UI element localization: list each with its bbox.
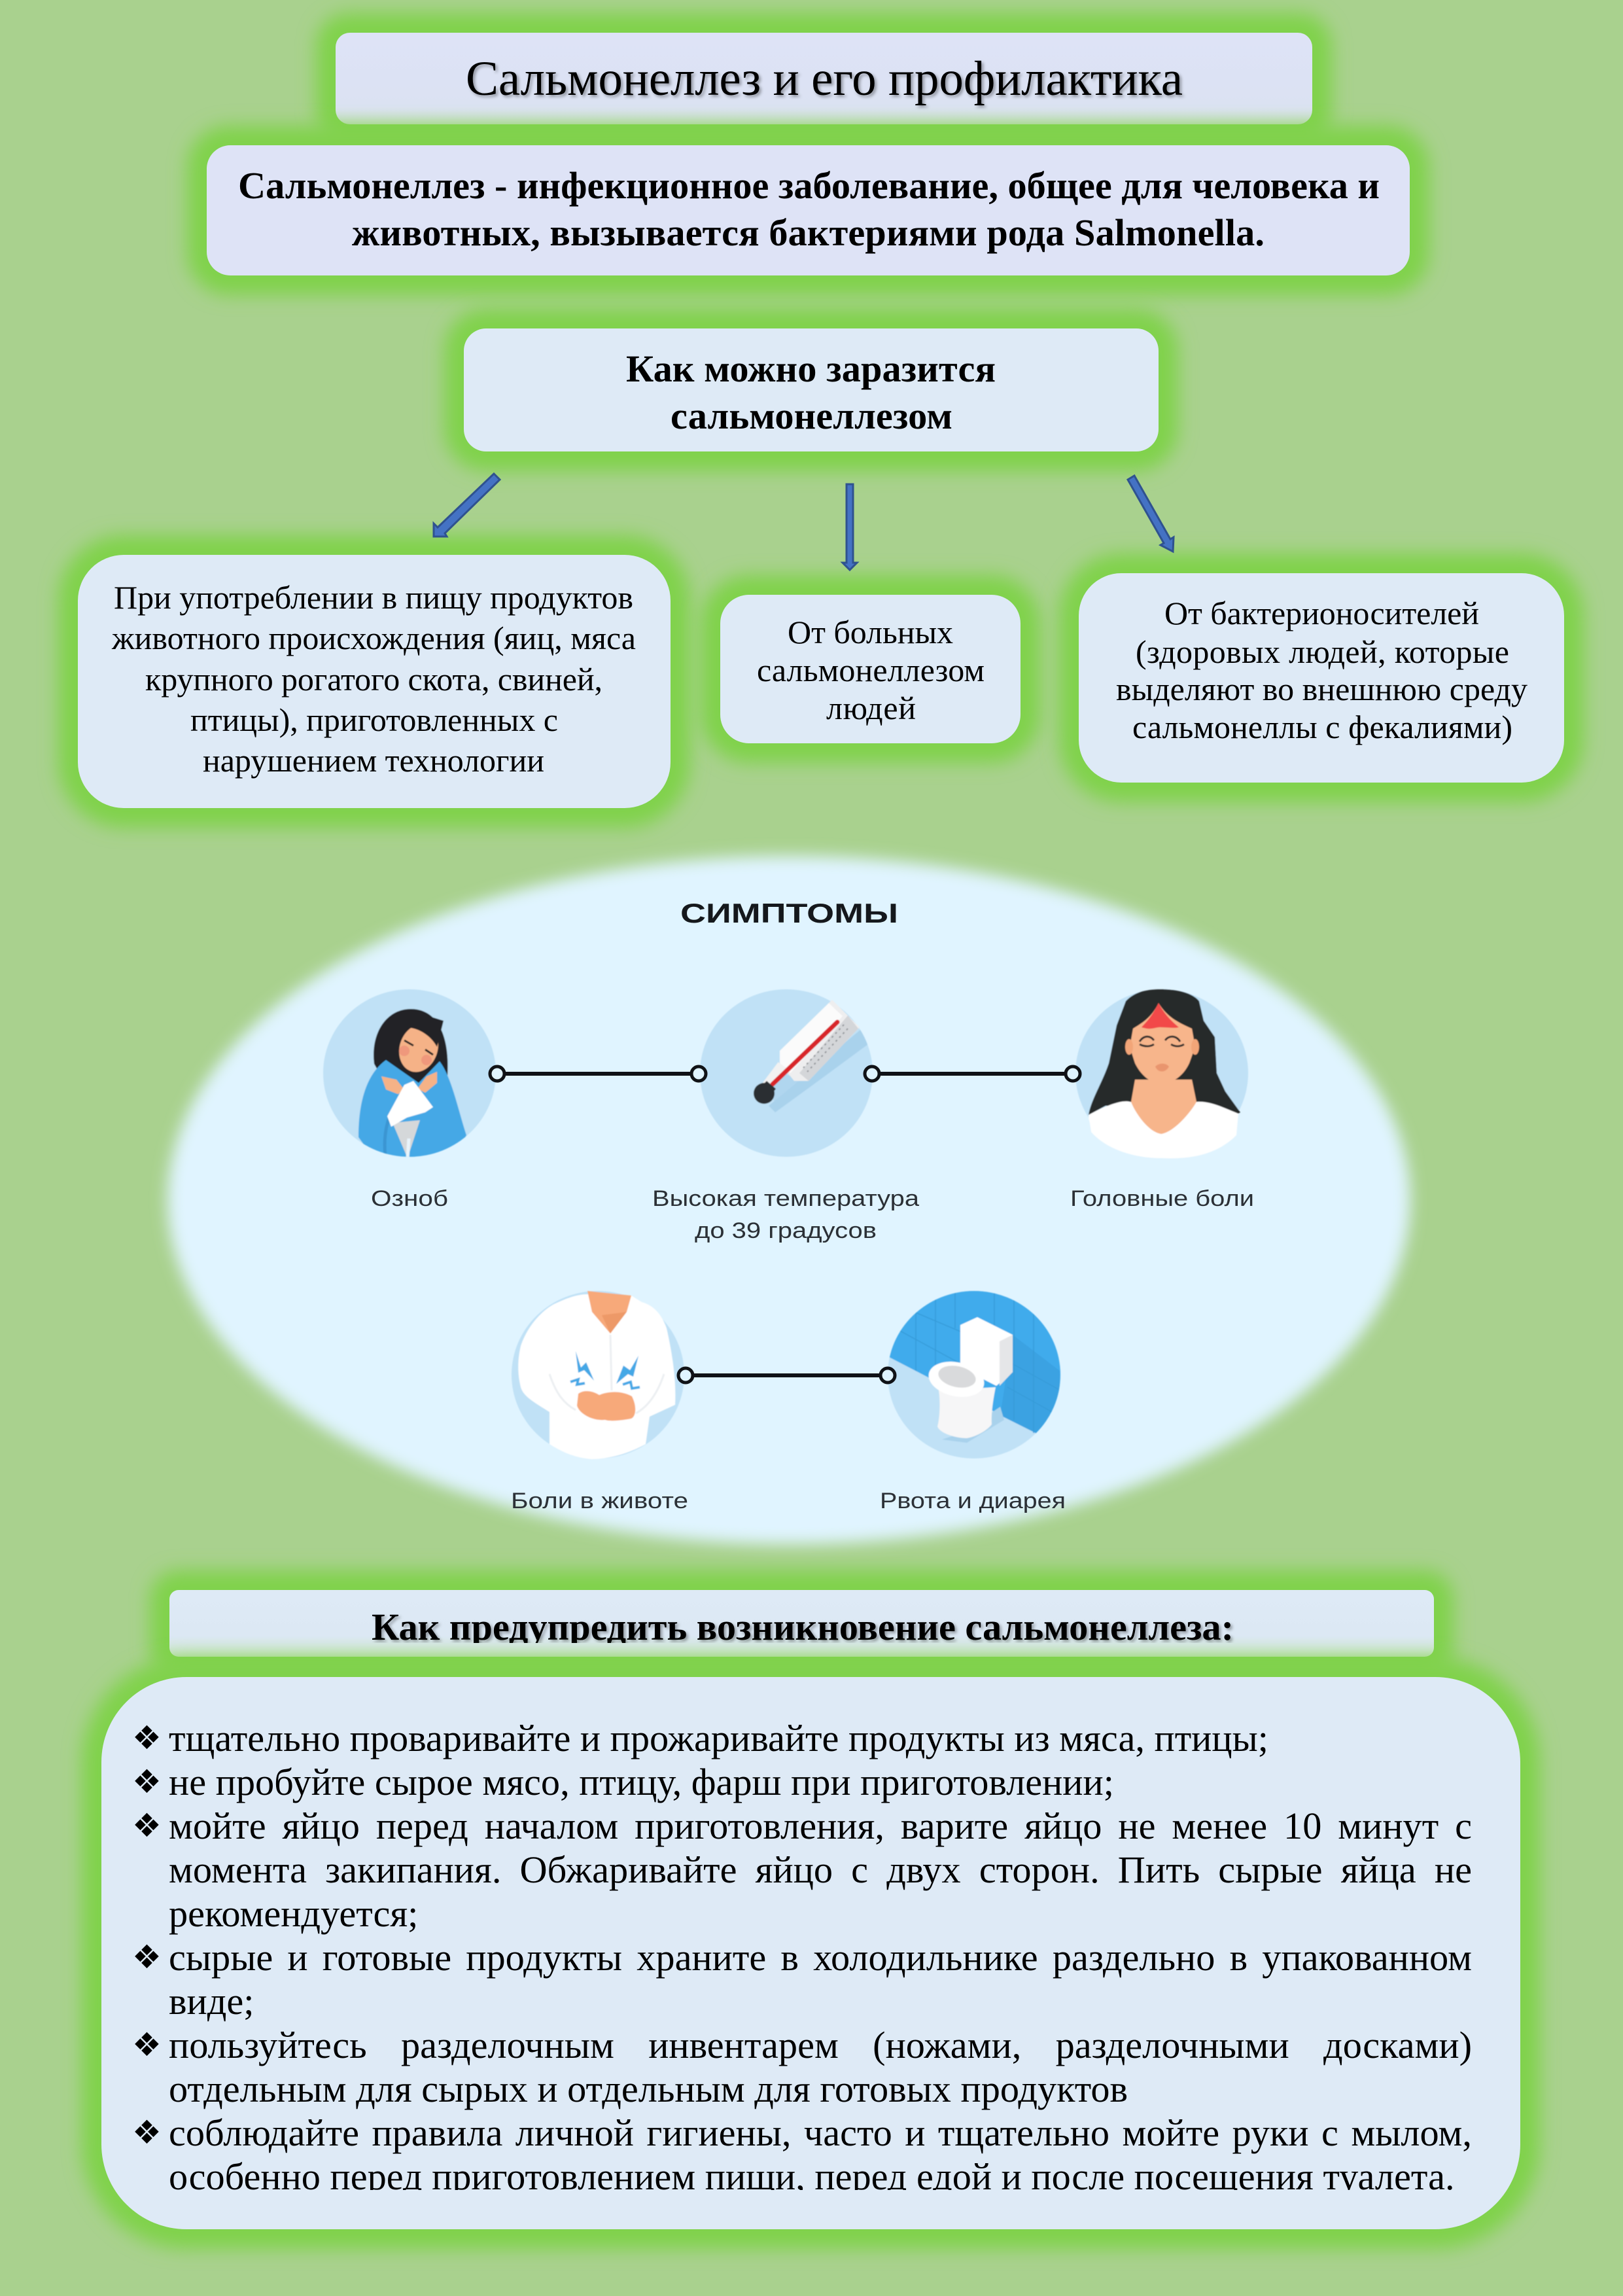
panel: how to get infected heading (444, 309, 1178, 471)
arrow: middle (843, 484, 857, 570)
connector: chills to fever (490, 1067, 706, 1081)
panel: prevention list background (82, 1657, 1540, 2249)
label: chills: Озноб (371, 1186, 448, 1211)
prevention heading text: Как предупредить возникновение сальмонеллеза: (372, 1606, 1234, 1648)
symptoms title: СИМПТОМЫ (680, 898, 898, 928)
panel: definition (187, 126, 1429, 295)
icon: chills (323, 989, 496, 1161)
food route text: нарушением технологии (203, 742, 544, 779)
panel: food route (58, 535, 690, 828)
definition text: животных, вызывается бактериями рода Salmonella. (352, 211, 1265, 254)
prevention list text: ❖ (132, 1938, 162, 1976)
food route text: животного происхождения (яиц, мяса (111, 620, 636, 656)
label: abdominal pain: Боли в животе (511, 1489, 688, 1513)
panel: symptoms ellipse (167, 856, 1410, 1544)
label: high fever: Высокая температура (652, 1186, 919, 1211)
food route text: крупного рогатого скота, свиней, (145, 661, 602, 698)
prevention list text: момента закипания. Обжаривайте яйцо с двух сторон. Пить сырые яйца не (169, 1848, 1472, 1891)
connector: pain to toilet (678, 1368, 895, 1383)
carriers text: От бактерионосителей (1164, 595, 1479, 631)
carriers text: выделяют во внешнюю среду (1116, 671, 1527, 707)
label: vomiting and diarrhea: Рвота и диарея (880, 1489, 1066, 1513)
prevention list text: мойте яйцо перед началом приготовления, варите яйцо не менее 10 минут с (169, 1805, 1472, 1847)
prevention list text: тщательно проваривайте и прожаривайте продукты из мяса, птицы; (169, 1717, 1268, 1759)
arrow: right (1128, 476, 1174, 552)
heading text (626, 347, 996, 437)
prevention list text: ❖ (132, 1719, 162, 1757)
prevention list text: отдельным для сырых и отдельным для готовых продуктов (169, 2068, 1128, 2110)
panel: sick people route (701, 575, 1040, 763)
prevention list text: соблюдайте правила личной гигиены, часто и тщательно мойте руки с мылом, (169, 2111, 1472, 2154)
prevention list text: сырые и готовые продукты храните в холодильнике раздельно в упакованном (169, 1936, 1472, 1979)
carriers text (1116, 595, 1527, 745)
prevention list text: виде; (169, 1980, 254, 2022)
prevention list text: ❖ (132, 1763, 162, 1801)
food route text (111, 579, 636, 779)
connector: fever to headache (865, 1067, 1080, 1081)
sick people text (757, 614, 985, 726)
prevention list text (132, 1717, 1472, 2190)
label: headache: Головные боли (1070, 1186, 1254, 1211)
definition text (238, 164, 1380, 254)
carriers text: (здоровых людей, которые (1136, 633, 1509, 670)
arrow: left (434, 474, 500, 537)
sick people text: людей (826, 690, 916, 726)
food route text: птицы), приготовленных с (190, 701, 558, 738)
panel: carriers route (1059, 554, 1584, 802)
label: high fever (652, 1186, 919, 1243)
icon: abdominal pain (512, 1291, 684, 1459)
prevention list text: не пробуйте сырое мясо, птицу, фарш при приготовлении; (169, 1761, 1114, 1803)
prevention list text: пользуйтесь разделочным инвентарем (ножами, разделочными досками) (169, 2024, 1472, 2066)
prevention list text: ❖ (132, 2113, 162, 2151)
heading text: сальмонеллезом (671, 395, 952, 437)
icon: high fever thermometer (700, 989, 873, 1157)
sick people text: От больных (788, 614, 953, 650)
definition text: Сальмонеллез - инфекционное заболевание, общее для человека и (238, 164, 1380, 207)
sick people text: сальмонеллезом (757, 652, 985, 688)
prevention list text: ❖ (132, 1807, 162, 1845)
title text: Сальмонеллез и его профилактика (466, 52, 1183, 106)
food route text: При употреблении в пищу продуктов (114, 579, 633, 616)
heading text: Как можно заразится (626, 347, 996, 390)
icon: toilet (888, 1290, 1061, 1459)
icon: headache woman (1075, 989, 1248, 1158)
carriers text: сальмонеллы с фекалиями) (1132, 709, 1512, 745)
panel: title (316, 13, 1332, 144)
label: high fever: до 39 градусов (695, 1218, 877, 1243)
prevention list text: рекомендуется; (169, 1892, 418, 1935)
prevention list text: ❖ (132, 2026, 162, 2064)
panel: prevention heading (150, 1570, 1454, 1676)
